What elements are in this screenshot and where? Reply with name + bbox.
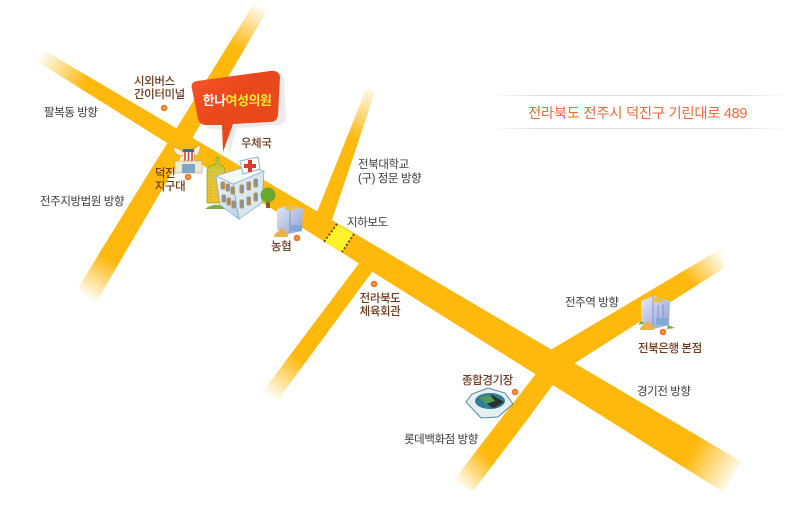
label: intercity bus terminal: 시외버스 [134,76,175,88]
location dots [162,106,665,394]
road: south branch [263,262,372,401]
road: southeast crossing [453,248,724,491]
callout: hospital name [192,71,286,155]
label: Gyeonggijeon direction: 경기전 방향 [637,384,691,398]
map labels [40,75,702,446]
icon: nonghyup bank [274,205,303,237]
tree [266,199,270,208]
label: post office: 우체국 [241,137,272,150]
label: Jeonju station direction: 전주역 방향 [565,296,619,309]
label: Palbok-dong direction: 팔복동 방향 [44,105,98,119]
label: Jeolla gymnasium: 전라북도 [360,293,400,305]
label: Jeolla gymnasium: 체육회관 [360,305,401,318]
label: underpass: 지하보도 [347,215,388,229]
label: court direction: 전주지방법원 방향 [40,194,125,208]
syringe tower [207,157,225,203]
label: Jeonbuk university gate direction: (구) 정문 방향 [358,172,422,185]
road: main diagonal [35,52,742,492]
label: Jeonbuk bank head office: 전북은행 본점 [638,341,702,355]
road: north branch [317,87,375,220]
label: sports complex: 종합경기장 [462,373,514,387]
label: intercity bus terminal: 간이터미널 [134,88,185,101]
underpass crossing [324,224,354,252]
label: nonghyup: 농협 [271,239,291,253]
icon: police box [173,145,202,173]
address text: 전라북도 전주시 덕진구 기린대로 489 [528,105,747,122]
label: Deokjin police box: 덕진 [155,168,175,180]
icon: jeonbuk bank [639,296,675,330]
red cross sign [240,157,260,174]
label: Lotte department store direction: 롯데백화점 방향 [404,433,479,446]
label: Deokjin police box: 지구대 [155,179,185,193]
label: Jeonbuk university gate direction: 전북대학교 [358,159,409,171]
icon: stadium [466,388,513,418]
icon: hospital building [205,157,276,219]
building body [216,176,239,219]
road: northwest crossing [78,5,268,304]
callout: hospital name: 한나여성의원 [203,93,271,108]
